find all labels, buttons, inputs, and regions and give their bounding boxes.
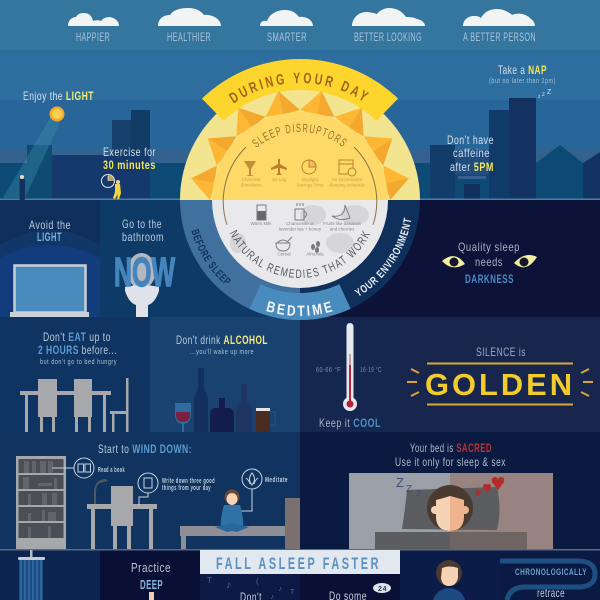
text: zzz: Z (406, 484, 413, 495)
finger (149, 592, 154, 600)
lower ring: before sleep (180, 200, 300, 320)
benefit labels: BETTER LOOKING (354, 30, 422, 44)
inner arc line (223, 147, 377, 225)
music notes: ( (256, 577, 259, 586)
panel: chronologically retrace (500, 561, 595, 600)
panel: nap (489, 63, 556, 100)
text: celsius: 16-19 °C (360, 365, 382, 374)
text: after 5pm: after 5PM (450, 160, 494, 174)
panel: fall asleep faster banner: FALL ASLEEP FASTER (216, 554, 381, 573)
sign (458, 176, 486, 179)
icon: walking figure (113, 180, 121, 199)
wine glass (175, 403, 191, 432)
icon: airplane (271, 159, 287, 175)
icon: cocktail (244, 161, 256, 176)
label: chemical stimulants (240, 177, 262, 188)
label: inconsistent schedule (329, 177, 366, 188)
panel: alcohol (175, 333, 275, 432)
panel: caffeine (447, 133, 494, 179)
music notes: ♪ (226, 579, 232, 591)
meditating person (215, 490, 249, 532)
inner disc: sleep disruptors (212, 112, 388, 200)
text: natural remedies: NATURAL REMEDIES THAT WORK (230, 230, 370, 278)
panel: sacred bed (349, 441, 553, 550)
label: daylight savings (296, 177, 324, 188)
panel: avoid the light (0, 218, 100, 317)
banner: during your day (202, 59, 398, 121)
label: fruits (323, 221, 362, 232)
text: zzz: Z (547, 89, 552, 96)
benefit labels: HEALTHIER (167, 30, 211, 44)
person (433, 560, 465, 600)
text: fahrenheit: 60-66 °F (316, 365, 341, 374)
panel: don't eat (20, 330, 128, 432)
tab: bedtime (249, 284, 351, 320)
text: sleep and sex: Use it only for sleep & sex (395, 455, 506, 469)
label: fruits: and cherries (330, 226, 355, 232)
text: during your day: DURING YOUR DAY (228, 72, 369, 104)
laptop glow (0, 230, 100, 317)
music notes: T (290, 589, 295, 596)
text: your bed is sacred: Your bed is SACRED (410, 441, 492, 455)
icon: thought cloud 24: 24 (378, 586, 387, 593)
text: keep it cool: Keep it COOL (319, 416, 381, 430)
label: chamomile tea (279, 221, 322, 232)
label: chemical stimulants: Stimulants (240, 182, 262, 188)
bed with wall (180, 498, 300, 550)
panel: enjoy the light (3, 89, 94, 200)
text: wake up: ...you'll wake up more (190, 347, 254, 356)
inner disc: natural remedies (212, 200, 388, 288)
cloud: smarter (260, 10, 313, 26)
text: exercise: Exercise for (103, 145, 156, 159)
text: golden: GOLDEN (425, 367, 575, 402)
label: chamomile tea: Chamomile or (286, 221, 315, 226)
panel: shower (18, 550, 45, 600)
text: silence is: SILENCE is (476, 345, 526, 359)
text: avoid the: Avoid the (29, 218, 71, 232)
label: jet lag: Jet Lag (272, 177, 287, 182)
bed (349, 473, 553, 550)
bookshelf (16, 456, 66, 550)
label: chamomile tea: lavender tea + honey (279, 226, 322, 232)
ribbon (500, 561, 595, 600)
sleeping head (427, 485, 473, 531)
label: daylight savings: Savings Time (296, 182, 324, 188)
cloud: happier (68, 13, 119, 26)
text: read a book: Read a book (98, 467, 125, 474)
bottles (194, 368, 252, 432)
text: journal: things from your day (162, 485, 211, 492)
icon: laptop (10, 266, 89, 317)
icon: journal (138, 473, 158, 505)
decorative golden lines (407, 364, 593, 404)
text: take a nap: Take a NAP (498, 63, 547, 77)
lower ring: your environment (300, 200, 420, 320)
text: bathroom: bathroom (122, 230, 164, 244)
panel: fall asleep faster banner (200, 550, 400, 574)
panel: exercise (102, 145, 156, 199)
text: wind down heading: Start to WIND DOWN: (98, 442, 192, 456)
text: don't drink alcohol: Don't drink ALCOHOL (176, 333, 268, 347)
panel: deep breathing (131, 560, 171, 600)
label: daylight savings: Daylight (302, 177, 319, 182)
text: bedtime: BEDTIME (266, 301, 333, 316)
label: fruits: Fruits like bananas (323, 221, 362, 226)
benefit labels: A BETTER PERSON (463, 30, 536, 44)
sun rays (191, 91, 409, 200)
skyline buildings (0, 98, 600, 200)
panel: keep it cool (316, 323, 382, 430)
text: now: NOW (114, 249, 175, 295)
cloud: better looking (352, 8, 425, 26)
icon: read a book (52, 458, 94, 478)
panel: bathroom (114, 217, 175, 317)
faint blobs (230, 205, 369, 253)
icon: clock (102, 174, 114, 188)
label: inconsistent schedule: An inconsistent (332, 177, 363, 182)
clouds row (68, 8, 535, 26)
benefit labels (76, 30, 536, 44)
text: zzz: z (542, 92, 546, 98)
icon: banana (332, 205, 350, 220)
icon: sun (50, 106, 64, 122)
icon: thought cloud 24 (373, 583, 391, 593)
label: almonds: Almonds (306, 252, 324, 256)
text: hungry note: but don't go to bed hungry (40, 357, 117, 366)
text: journal (162, 478, 215, 492)
text: darkness: DARKNESS (465, 274, 514, 286)
text: zzz (538, 89, 552, 100)
text: zzz: z (538, 94, 541, 100)
thermometer (343, 323, 357, 411)
text: nap note: (but no later than 2pm) (489, 78, 556, 85)
icon: milk glass (257, 205, 266, 220)
text: don't eat: Don't EAT up to (43, 330, 111, 344)
text: quality sleep: Quality sleep (458, 240, 520, 254)
icon: right eye (514, 255, 537, 267)
music notes: ♪ (278, 584, 283, 593)
light beam (3, 118, 62, 198)
icon: cereal bowl (276, 237, 292, 251)
text: your environment: YOUR ENVIRONMENT (354, 218, 412, 296)
text: 2 hours: 2 HOURS before... (38, 343, 117, 357)
text: enjoy the light: Enjoy the LIGHT (23, 89, 94, 103)
benefit labels: SMARTER (267, 30, 307, 44)
icon: calendar (339, 160, 356, 176)
text: retrace: retrace (537, 586, 565, 600)
beer mug (256, 408, 275, 432)
text: meditate: Meditate (265, 477, 288, 484)
music notes: T (207, 576, 213, 585)
text: practice: Practice (131, 560, 171, 575)
text: caffeine: caffeine (453, 146, 490, 160)
icon: person (20, 175, 25, 200)
music notes (207, 576, 295, 600)
text: 30 minutes: 30 minutes (103, 160, 156, 172)
icon: left eye (442, 256, 465, 267)
text: journal: Write down three good (162, 478, 215, 485)
icon: meditate (240, 469, 262, 511)
label: warm milk: Warm Milk (250, 221, 272, 226)
label: inconsistent schedule: sleeping schedule (329, 182, 366, 188)
sun disc (180, 80, 420, 200)
label: cereal: Cereal (277, 252, 291, 256)
hearts (475, 477, 504, 496)
panel: silence is golden (407, 345, 593, 404)
row divider (0, 549, 600, 550)
dining table and chairs (20, 378, 128, 432)
icon: clock (302, 160, 316, 174)
text: zzz: Z (396, 475, 405, 490)
panel: wind down (16, 442, 300, 550)
desk and chair (87, 479, 157, 550)
text: deep: DEEP (140, 577, 163, 592)
icon: toilet (125, 253, 159, 317)
text: don't have: Don't have (447, 133, 494, 147)
text: zzz: Z (416, 489, 422, 498)
icon: tea mug (295, 203, 306, 220)
benefit labels: HAPPIER (76, 30, 110, 44)
icon: almonds (311, 241, 320, 253)
text: before sleep: BEFORE SLEEP (192, 229, 230, 284)
text: needs: needs (475, 255, 503, 269)
cloud: a better person (463, 9, 535, 26)
text: light: LIGHT (37, 232, 62, 244)
label: chemical stimulants: Chemical (242, 177, 260, 182)
cloud: healthier (158, 8, 221, 26)
text: zzz (396, 475, 422, 498)
central sun dial (180, 59, 420, 320)
panel: darkness (442, 240, 537, 286)
text: sleep disruptors: SLEEP DISRUPTORS (252, 124, 347, 147)
text: go to the: Go to the (122, 217, 162, 231)
